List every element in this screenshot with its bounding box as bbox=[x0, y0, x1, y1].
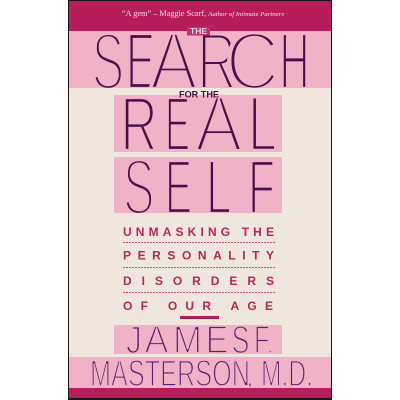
title: search: A bbox=[150, 16, 198, 107]
author panel: james f.: F bbox=[254, 319, 270, 362]
cover background bbox=[68, 0, 332, 400]
author panel: masterson: MASTERSON bbox=[90, 353, 250, 394]
comma: , bbox=[248, 372, 252, 388]
title panel: real: A bbox=[195, 80, 243, 168]
title panel: self: S bbox=[123, 143, 154, 231]
author panel: james f.: S bbox=[232, 319, 250, 362]
title panel: real: E bbox=[165, 82, 190, 168]
top pink band bbox=[69, 31, 331, 88]
title panel: real: L bbox=[248, 82, 277, 168]
subtitle: UNMASKING THE bbox=[123, 225, 274, 239]
author panel: james f. bbox=[114, 325, 282, 354]
title panel: self: F bbox=[248, 145, 275, 231]
top crimson band bbox=[69, 1, 331, 31]
title panel: self: E bbox=[165, 145, 192, 231]
title: search: S bbox=[92, 17, 124, 107]
subtitle: OF OUR AGE bbox=[123, 299, 273, 313]
book cover bbox=[68, 0, 332, 400]
subtitle bbox=[123, 225, 275, 313]
title: search: C bbox=[226, 16, 280, 107]
subtitle: PERSONALITY bbox=[123, 248, 274, 262]
divider bar bbox=[180, 316, 219, 319]
title: search: R bbox=[197, 17, 237, 107]
title panel: real: R bbox=[120, 82, 158, 168]
author panel: james f.: J bbox=[126, 319, 142, 362]
endorsement quote: “A gem” – Maggie Scarf, Author of Intimate Partners bbox=[122, 9, 284, 18]
author panel: masterson: M.D. bbox=[261, 353, 313, 394]
bottom crimson band bbox=[69, 388, 331, 398]
author panel: james f.: M bbox=[173, 319, 202, 362]
subtitle: DISORDERS bbox=[123, 274, 274, 288]
title panel: self: L bbox=[206, 145, 232, 231]
title: search: H bbox=[280, 17, 310, 106]
author panel: james f.: . bbox=[269, 344, 272, 354]
title: search bbox=[96, 34, 306, 88]
author panel: james f.: A bbox=[144, 319, 169, 362]
title panel: real bbox=[114, 95, 282, 152]
title: search: E bbox=[126, 17, 155, 106]
label: the: THE bbox=[190, 27, 208, 36]
author panel: masterson bbox=[69, 357, 331, 388]
label: for the: FOR THE bbox=[179, 90, 219, 100]
cream panel bbox=[69, 1, 331, 398]
author panel: james f.: E bbox=[206, 319, 228, 362]
title panel: self bbox=[114, 157, 282, 213]
label: the bbox=[187, 27, 210, 36]
